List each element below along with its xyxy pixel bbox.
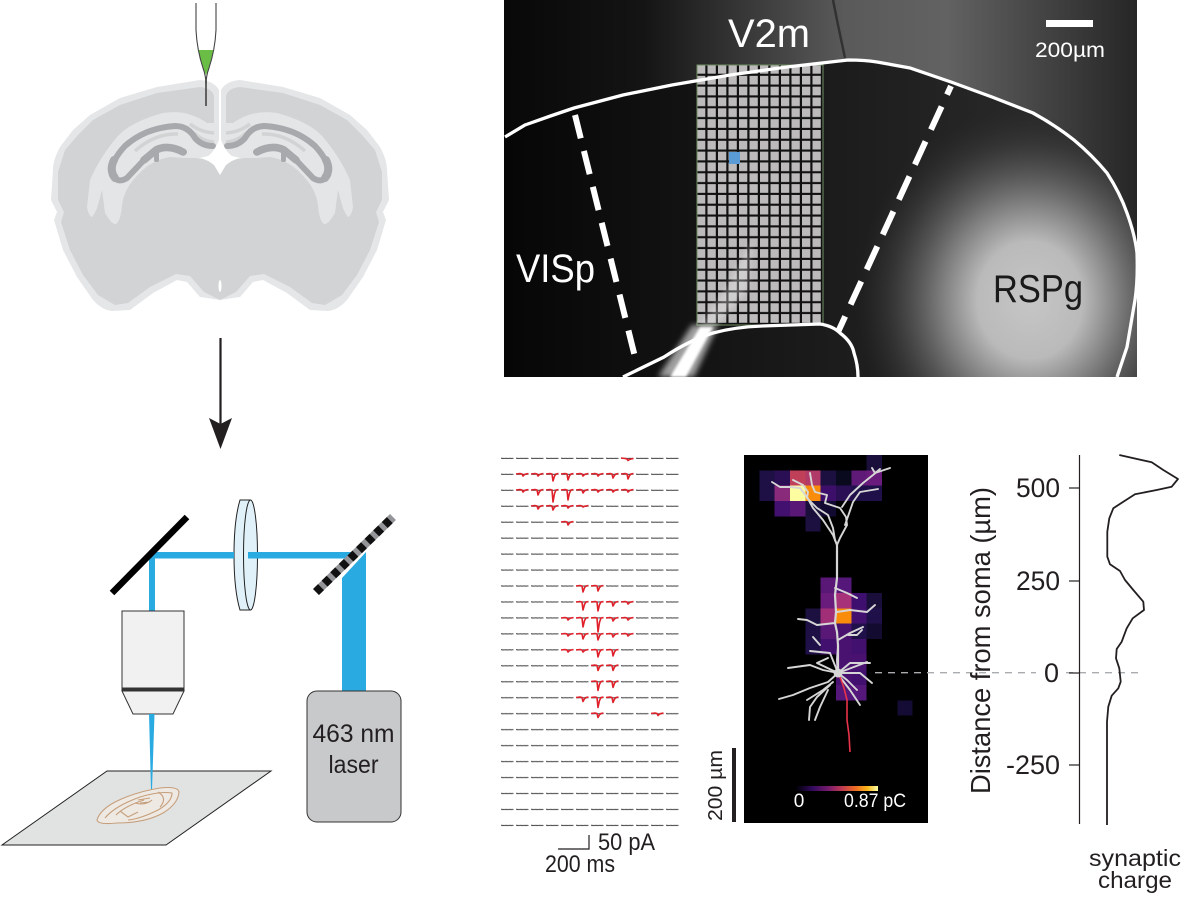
outer cortex outline [505,60,1137,377]
galvo mirror striped [316,517,393,592]
arrow from brain to microscope [209,338,232,449]
black traces [501,450,681,833]
panel: EPSC traces grid [501,450,681,878]
micrograph scale bar: 200µm [1035,39,1105,62]
brain slice on slide [97,788,179,824]
blue laser beam path [149,552,366,691]
y axis title: Distance from soma (µm) [965,487,996,794]
soma level dashed line [875,672,1144,674]
panel: synaptic charge heatmap with neuron [705,455,928,823]
panel: charge profile chart [965,455,1181,893]
y axis with ticks [1069,455,1080,824]
objective [122,611,184,714]
laser box: 463 nm [312,720,394,748]
trace scale bar: 200 ms [545,851,615,878]
panel: brain slice micrograph [504,0,1137,377]
synaptic charge curve [1107,455,1178,825]
label RSPg: RSPg [993,268,1083,311]
colour bar: 0.87 pC [844,791,906,812]
injection pipette with green virus [196,3,216,106]
heatmap cells [759,455,913,716]
focused beam [149,714,154,790]
y axis tick labels: -250 [1006,750,1060,780]
axon in red [840,677,850,752]
laser box: laser [328,751,378,779]
trace scale bar [545,829,655,878]
x axis label [1089,845,1181,893]
red response traces [516,458,664,718]
boundary VISp dashed [575,115,635,357]
laser box [307,691,401,822]
micrograph scale bar [1035,20,1105,62]
micrograph background [504,0,1137,377]
x axis label: synaptic [1089,845,1181,871]
colour bar: 0 [794,791,804,812]
turning mirror [112,517,187,593]
label VISp: VISp [516,247,595,291]
pipette glare [658,325,718,377]
x axis label: charge [1098,867,1172,893]
brain coronal section [51,80,389,311]
label V2m: V2m [728,12,810,56]
heatmap background [744,455,928,823]
colour bar [794,786,906,812]
trace scale bar: 50 pA [598,829,655,856]
panel: brain section with injection [51,3,389,311]
y axis tick labels [1006,473,1060,780]
y axis tick labels: 500 [1016,473,1060,503]
y axis tick labels: 250 [1016,566,1060,596]
lens [234,500,258,610]
heatmap scale bar: 200 µm [705,750,727,821]
sample slide [2,771,271,845]
boundary RSPg dashed [838,86,951,332]
stimulated grid spot [729,152,740,164]
panel: optical setup [2,500,401,845]
stimulation grid [697,65,823,325]
white matter outline [623,324,858,377]
neuron morphology [772,468,890,720]
y axis tick labels: 0 [1044,658,1059,688]
heatmap scale bar [705,748,736,822]
